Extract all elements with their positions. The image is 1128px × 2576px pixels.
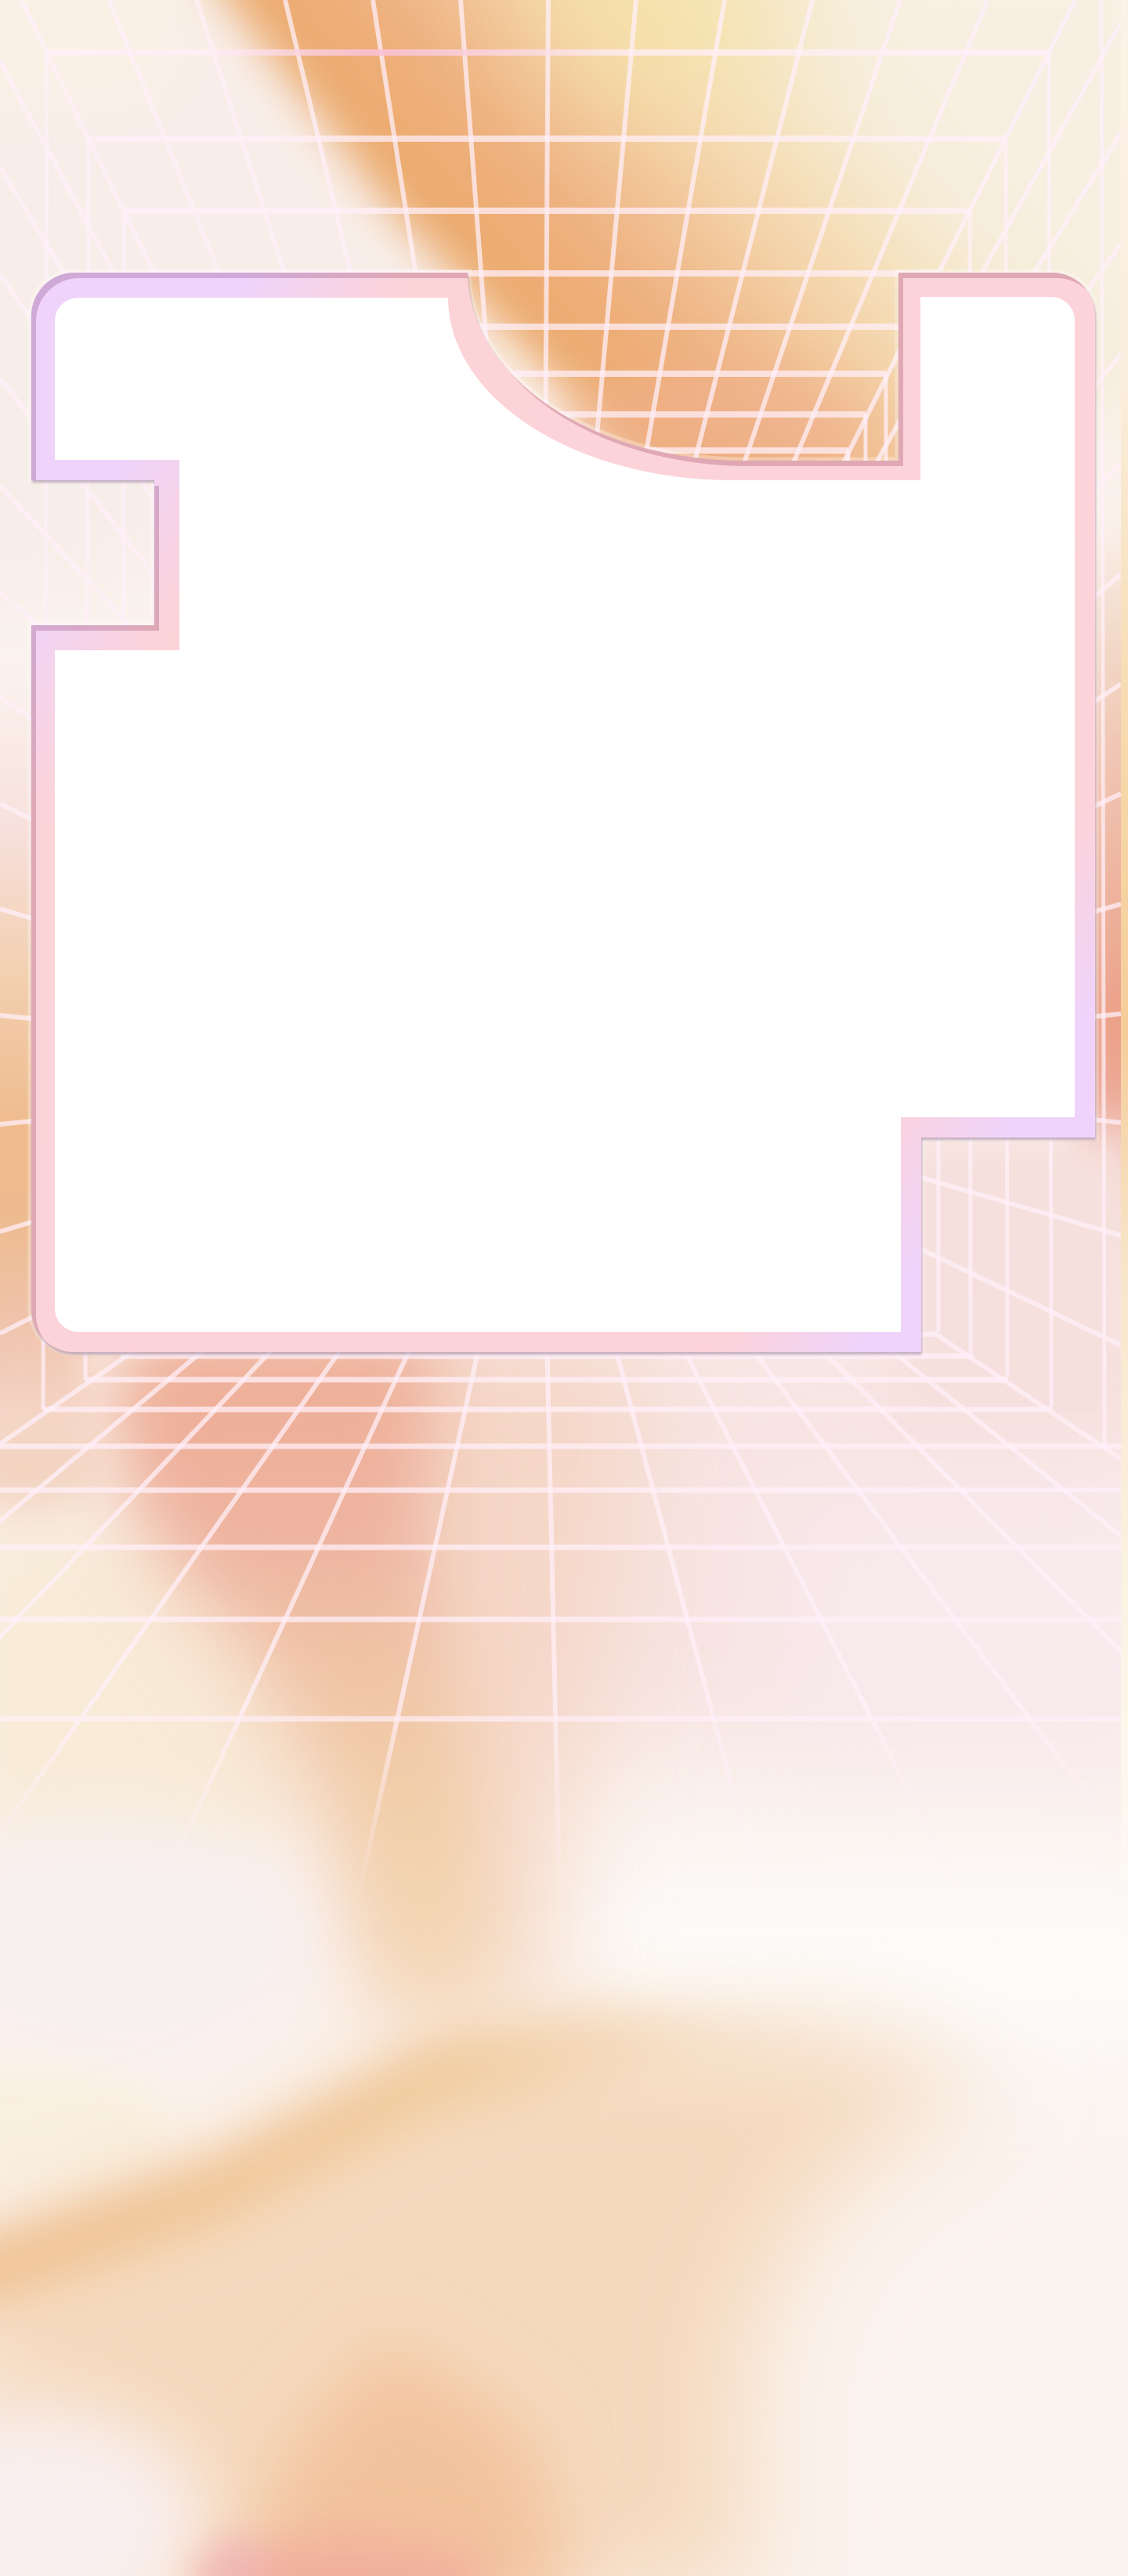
floor cross lines bbox=[0, 1334, 1121, 1719]
floor converging lines bbox=[0, 1334, 1128, 1919]
white content area bbox=[55, 297, 1075, 1332]
pink accent on top ceiling line bbox=[204, 49, 627, 56]
frame panel bbox=[31, 273, 1100, 1358]
frame halo and drop shadow bbox=[31, 273, 1096, 1355]
ceiling converging lines bbox=[21, 0, 1076, 470]
left wall lines bbox=[0, 61, 157, 1333]
ribbon border bbox=[31, 273, 1100, 1358]
right wall lines bbox=[848, 23, 1121, 1345]
ceiling cross lines bbox=[47, 52, 1049, 450]
wall verticals bbox=[43, 0, 1104, 1445]
perspective grid room bbox=[0, 0, 1128, 1919]
right edge strip bbox=[1121, 0, 1128, 1880]
